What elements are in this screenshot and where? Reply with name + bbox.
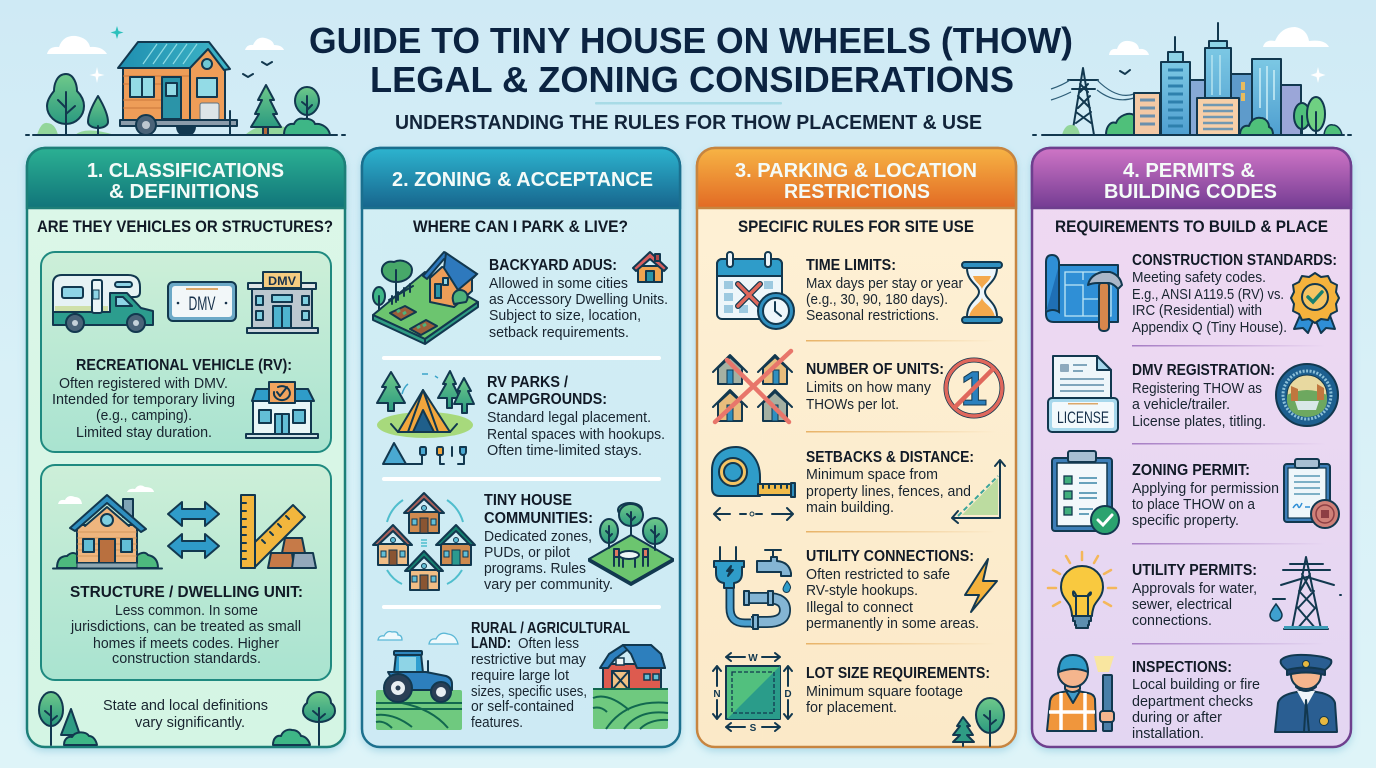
- panel 3 subheading: SPECIFIC RULES FOR SITE USE: [738, 217, 974, 236]
- icon: lot dimensions: N: [713, 689, 721, 700]
- item: tiny house communities: [373, 492, 673, 593]
- text: construction standards: E.g., ANSI A119.5 (RV) vs.: [1132, 286, 1284, 303]
- text: construction standards: IRC (Residential) with: [1132, 302, 1262, 319]
- text: recreational vehicle: (e.g., camping).: [96, 407, 192, 424]
- text: lot size: [806, 665, 990, 716]
- icon: cluster of tiny houses: [373, 493, 475, 590]
- item: number of units: [713, 351, 1002, 422]
- text: RV parks: [487, 374, 665, 459]
- icon: blueprint and hammer: [1046, 255, 1122, 331]
- text: zoning permit: specific property.: [1132, 512, 1239, 529]
- panel: permits and building codes: [1032, 148, 1351, 747]
- text: rural land: Often less: [518, 635, 579, 652]
- text: inspections: installation.: [1132, 725, 1204, 742]
- text: RV parks: Standard legal placement.: [487, 409, 651, 426]
- text: structure or dwelling unit: construction standards.: [112, 650, 261, 667]
- text: number of units: [806, 361, 944, 413]
- panel 4 header: 4. PERMITS &: [1123, 160, 1255, 182]
- text: tiny house communities: [484, 492, 613, 593]
- text: inspections: during or after: [1132, 709, 1222, 726]
- panel 2 header: [362, 148, 680, 208]
- panel 1 subheading: ARE THEY VEHICLES OR STRUCTURES?: [37, 217, 333, 236]
- icon: bidirectional arrows: [168, 502, 219, 558]
- panel 3 header: RESTRICTIONS: [784, 181, 930, 203]
- icon: prohibited number one: 1: [961, 363, 987, 416]
- text: rural land: RURAL / AGRICULTURAL: [471, 620, 630, 637]
- item: construction standards: [1046, 252, 1339, 336]
- text: lot size: for placement.: [806, 699, 897, 716]
- icon: calendar with clock: [717, 252, 794, 329]
- text: structure or dwelling unit: Less common. In some: [115, 602, 258, 619]
- item: time limits: [717, 252, 1002, 329]
- icon: tractor on field: [376, 632, 462, 730]
- text: utility permits: UTILITY PERMITS:: [1132, 562, 1257, 579]
- item: zoning permit: [1052, 451, 1339, 534]
- icon: small home: [633, 252, 667, 282]
- text: backyard ADUs: Allowed in some cities: [489, 275, 628, 292]
- text: structure or dwelling unit: [70, 584, 303, 667]
- text: number of units: NUMBER OF UNITS:: [806, 361, 944, 378]
- text: construction standards: Appendix Q (Tiny House).: [1132, 319, 1287, 336]
- text: zoning permit: [1132, 462, 1279, 529]
- panel 1 header: & DEFINITIONS: [109, 181, 259, 203]
- text: tiny house communities: vary per community.: [484, 576, 613, 593]
- panel: parking and location restrictions: [697, 148, 1016, 747]
- item: backyard ADUs: [373, 252, 668, 344]
- text: recreational vehicle: Intended for temporary living: [52, 391, 235, 408]
- item: utility connections: [714, 547, 997, 632]
- text: RV parks: CAMPGROUNDS:: [487, 391, 607, 408]
- text: time limits: Seasonal restrictions.: [806, 307, 939, 324]
- icon: official seal: [1276, 364, 1338, 426]
- item: DMV registration: [1048, 356, 1338, 432]
- text: time limits: TIME LIMITS:: [806, 257, 896, 274]
- text: setbacks: property lines, fences, and: [806, 483, 971, 500]
- panel 1 header: 1. CLASSIFICATIONS: [87, 160, 284, 182]
- text: utility permits: Approvals for water,: [1132, 580, 1257, 597]
- note: definitions vary: vary significantly.: [135, 714, 245, 731]
- item: RV parks and campgrounds: [377, 371, 665, 464]
- icon: park with picnic table: [589, 503, 673, 585]
- text: DMV registration: License plates, titling.: [1132, 413, 1266, 430]
- card: recreational vehicle: [41, 252, 331, 452]
- text: utility connections: RV-style hookups.: [806, 582, 918, 599]
- text: construction standards: [1132, 252, 1337, 336]
- item: inspections: [1047, 655, 1337, 742]
- header illustration: city skyline with power tower: [1033, 23, 1351, 135]
- panel: classifications and definitions: [27, 148, 345, 747]
- icon: backyard garden with house: [373, 252, 478, 344]
- text: backyard ADUs: setback requirements.: [489, 324, 629, 341]
- text: RV parks: Often time-limited stays.: [487, 442, 642, 459]
- icon: lot dimensions: S: [750, 723, 757, 734]
- item: lot size requirements: [713, 653, 1004, 746]
- icon: inspector with flashlight: [1047, 655, 1114, 731]
- panel 3 header: [697, 148, 1016, 208]
- note: definitions vary: State and local definitions: [103, 697, 268, 714]
- icon: lot dimensions: D: [784, 689, 792, 700]
- text: structure or dwelling unit: STRUCTURE / DWELLING UNIT:: [70, 584, 303, 601]
- icon: pine and tree: [953, 698, 1004, 746]
- icon: fire marshal officer: [1275, 655, 1337, 732]
- text: DMV registration: Registering THOW as: [1132, 380, 1262, 397]
- text: time limits: [806, 257, 963, 324]
- text: rural land: features.: [471, 714, 523, 731]
- text: setbacks: Minimum space from: [806, 466, 938, 483]
- panel 2 header: 2. ZONING & ACCEPTANCE: [392, 169, 653, 191]
- card: structure or dwelling unit: [41, 465, 331, 680]
- icon: rental office: [246, 382, 318, 438]
- text: tiny house communities: TINY HOUSE: [484, 492, 572, 509]
- icon: hourglass: [962, 262, 1002, 323]
- text: zoning permit: ZONING PERMIT:: [1132, 462, 1250, 479]
- text: RV parks: RV PARKS /: [487, 374, 568, 391]
- icon: tent camping with hookups: [377, 371, 474, 464]
- icon: lot dimensions: W: [748, 653, 758, 664]
- text: rural land: LAND:: [471, 635, 511, 652]
- icon: lot dimensions: [713, 653, 792, 734]
- panel 1 header: [27, 148, 345, 208]
- text: construction standards: CONSTRUCTION STANDARDS:: [1132, 252, 1337, 269]
- icon: lightning bolt: [965, 559, 997, 612]
- icon: DMV office building: [247, 272, 318, 333]
- text: tiny house communities: PUDs, or pilot: [484, 544, 571, 561]
- icon: tree right of note: [273, 692, 335, 745]
- icon: document and license plate: [1048, 356, 1118, 432]
- text: tiny house communities: programs. Rules: [484, 560, 586, 577]
- text: DMV registration: a vehicle/trailer.: [1132, 396, 1230, 413]
- icon: setback triangle: [952, 460, 1005, 523]
- text: time limits: (e.g., 30, 90, 180 days).: [806, 291, 948, 308]
- text: utility connections: UTILITY CONNECTIONS:: [806, 548, 974, 565]
- text: RV parks: Rental spaces with hookups.: [487, 426, 665, 443]
- title: GUIDE TO TINY HOUSE ON WHEELS (THOW): [309, 20, 1073, 61]
- icon: plug, faucet and pipe: [714, 547, 791, 629]
- panel 4 header: [1032, 148, 1351, 208]
- icon: RV camper: [53, 275, 153, 332]
- text: backyard ADUs: Subject to size, location,: [489, 307, 641, 324]
- text: lot size: Minimum square footage: [806, 683, 963, 700]
- text: structure or dwelling unit: jurisdictions, can be treated as small: [70, 618, 301, 635]
- text: zoning permit: to place THOW on a: [1132, 496, 1256, 513]
- text: number of units: Limits on how many: [806, 379, 931, 396]
- text: recreational vehicle: RECREATIONAL VEHICLE (RV):: [76, 357, 292, 374]
- text: recreational vehicle: Limited stay duration.: [76, 424, 212, 441]
- icon: rulers and bricks: [241, 495, 316, 568]
- icon: DMV license plate: [168, 282, 236, 321]
- icon: red barn on field: [593, 645, 668, 729]
- icon: light bulb: [1048, 552, 1116, 628]
- icon: DMV office building: DMV: [268, 274, 296, 288]
- text: zoning permit: Applying for permission: [1132, 480, 1279, 497]
- text: backyard ADUs: as Accessory Dwelling Units.: [489, 291, 668, 308]
- text: inspections: INSPECTIONS:: [1132, 659, 1232, 676]
- text: rural land: restrictive but may: [471, 651, 586, 668]
- item: rural and agricultural land: [376, 620, 668, 731]
- text: tiny house communities: Dedicated zones,: [484, 528, 592, 545]
- text: setbacks: [806, 449, 974, 516]
- panel 4 header: BUILDING CODES: [1104, 181, 1277, 203]
- text: utility connections: permanently in some areas.: [806, 615, 979, 632]
- text: utility permits: connections.: [1132, 612, 1212, 629]
- icon: crossed out houses: [713, 351, 792, 422]
- icon: trees left of note: [39, 692, 97, 745]
- icon: checklist clipboard: [1052, 451, 1119, 534]
- subtitle: UNDERSTANDING THE RULES FOR THOW PLACEMENT & USE: [395, 111, 982, 134]
- title: [309, 20, 1073, 100]
- text: utility permits: [1132, 562, 1257, 629]
- text: recreational vehicle: [52, 357, 292, 441]
- icon: quality badge: [1291, 273, 1339, 333]
- icon: power tower and water drop: [1270, 557, 1341, 629]
- item: utility permits: [1048, 552, 1341, 629]
- icon: tape measure: [712, 447, 795, 520]
- item: setbacks and distance: [712, 447, 1005, 523]
- text: time limits: Max days per stay or year: [806, 275, 963, 292]
- text: number of units: THOWs per lot.: [806, 396, 899, 413]
- text: setbacks: main building.: [806, 499, 894, 516]
- text: inspections: Local building or fire: [1132, 676, 1260, 693]
- panel 2 subheading: WHERE CAN I PARK & LIVE?: [413, 217, 628, 236]
- text: rural land: sizes, specific uses,: [471, 683, 587, 700]
- icon: stamped clipboard: [1284, 459, 1339, 528]
- text: lot size: LOT SIZE REQUIREMENTS:: [806, 665, 990, 682]
- panel 4 subheading: REQUIREMENTS TO BUILD & PLACE: [1055, 217, 1328, 236]
- text: tiny house communities: COMMUNITIES:: [484, 510, 593, 527]
- icon: document and license plate: LICENSE: [1057, 408, 1109, 427]
- text: rural land: require large lot: [471, 667, 570, 684]
- note: definitions vary: [103, 697, 268, 731]
- text: construction standards: Meeting safety codes.: [1132, 269, 1266, 286]
- panel 3 header: 3. PARKING & LOCATION: [735, 160, 977, 182]
- text: utility connections: Illegal to connect: [806, 599, 914, 616]
- text: structure or dwelling unit: homes if meets codes. Higher: [93, 635, 279, 652]
- text: backyard ADUs: [489, 257, 668, 341]
- text: setbacks: SETBACKS & DISTANCE:: [806, 449, 974, 466]
- text: utility permits: sewer, electrical: [1132, 596, 1232, 613]
- icon: small house: [53, 485, 162, 568]
- header illustration: tiny house with trees: [26, 26, 345, 136]
- text: utility connections: Often restricted to safe: [806, 566, 950, 583]
- title: LEGAL & ZONING CONSIDERATIONS: [370, 59, 1014, 100]
- text: recreational vehicle: Often registered with DMV.: [59, 375, 228, 392]
- text: utility connections: [806, 548, 979, 632]
- text: rural land: or self-contained: [471, 698, 574, 715]
- icon: DMV license plate: DMV: [188, 294, 216, 315]
- text: inspections: department checks: [1132, 693, 1253, 710]
- text: backyard ADUs: BACKYARD ADUS:: [489, 257, 617, 274]
- text: DMV registration: DMV REGISTRATION:: [1132, 362, 1275, 379]
- text: inspections: [1132, 659, 1260, 742]
- icon: prohibited number one: [946, 360, 1002, 416]
- text: DMV registration: [1132, 362, 1275, 430]
- text: rural land: [471, 620, 630, 731]
- panel: zoning and acceptance: [362, 148, 680, 747]
